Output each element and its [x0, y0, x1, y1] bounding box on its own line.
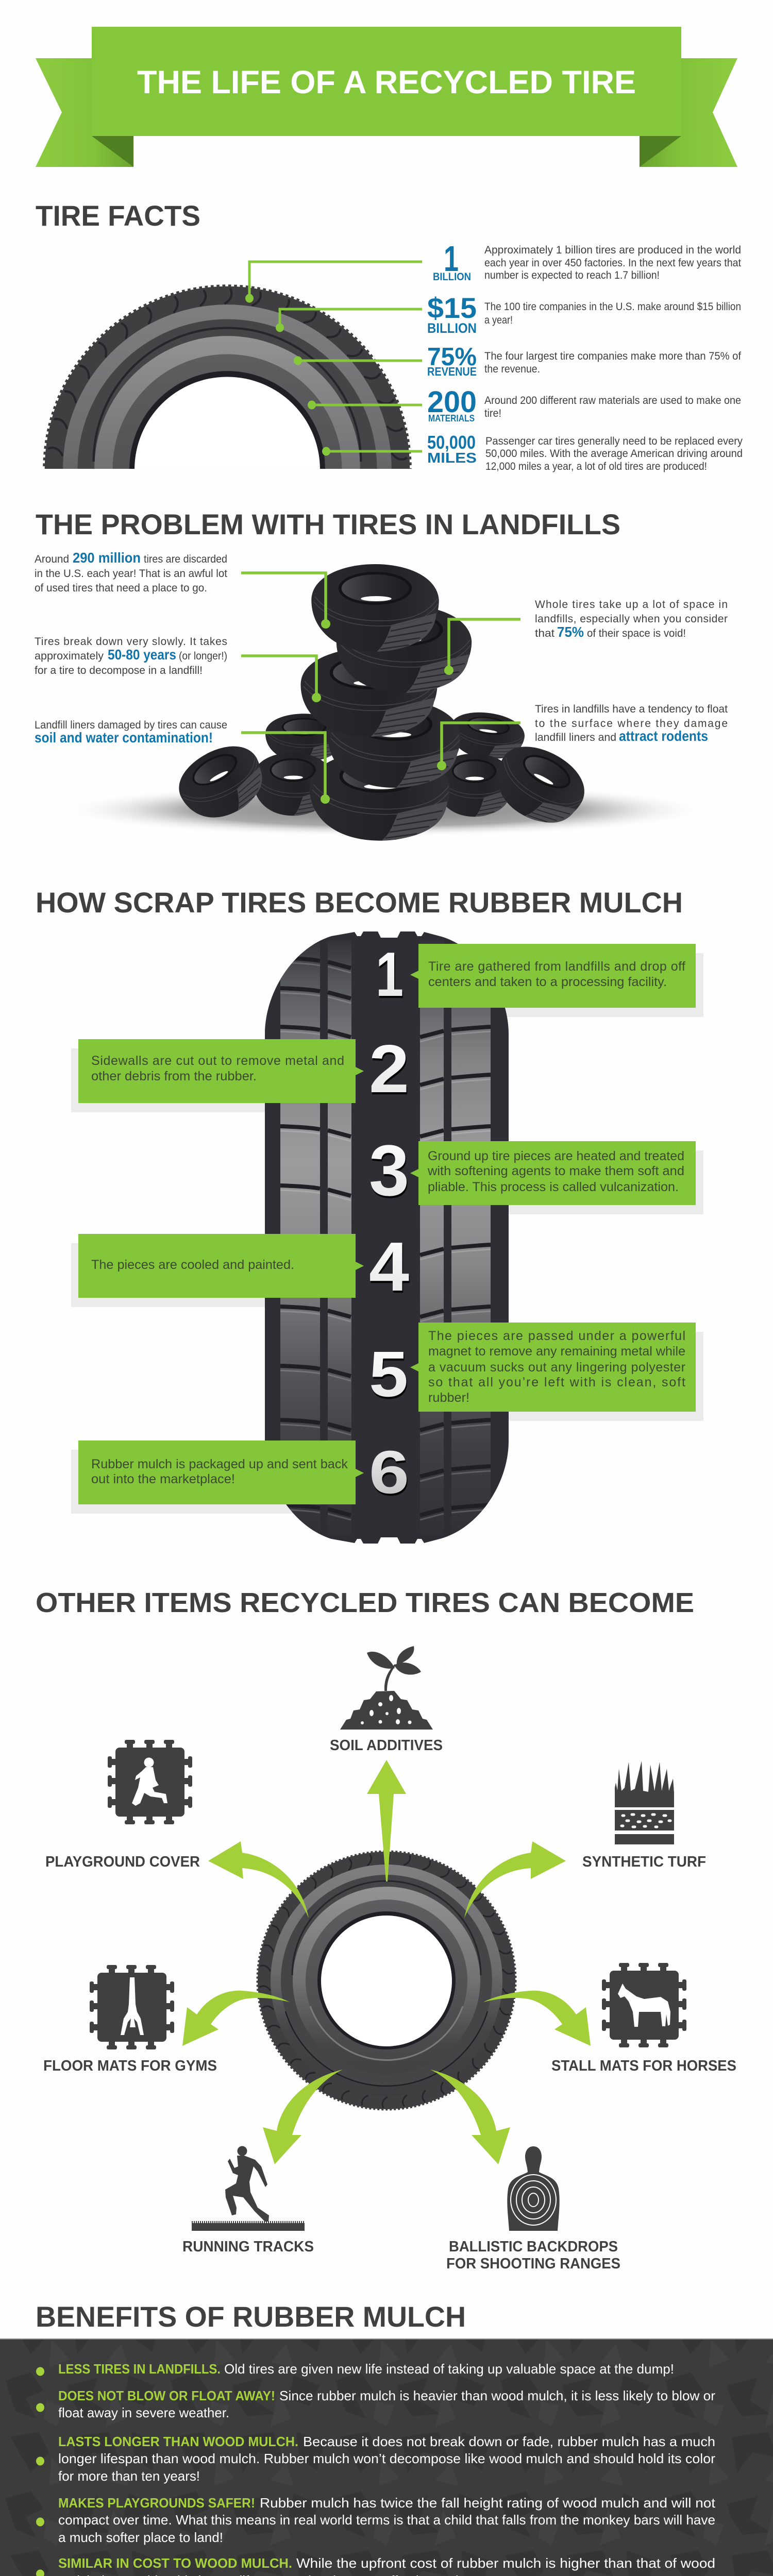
benefit 3 — [36, 2434, 715, 2484]
fact: 1 billion: Approximately 1 billion tires are produced in the world — [484, 244, 741, 256]
text: attract rodents: landfill liners and — [535, 732, 616, 743]
benefit 1: Old tires are given new life instead of taking up valuable space at the dump! — [224, 2361, 674, 2377]
benefit 5 — [36, 2555, 715, 2576]
step 5: The pieces are passed under a powerful — [428, 1329, 685, 1343]
fact: 200 materials: 200 — [427, 385, 477, 419]
benefit 2: float away in severe weather. — [58, 2405, 229, 2420]
fact: 75% revenue: The four largest tire companies make more than 75% of — [484, 350, 741, 362]
fact: $15 billion: The 100 tire companies in the U.S. make around $15 billion — [484, 301, 741, 313]
text: 50-80 years: for a tire to decompose in a landfill! — [35, 665, 203, 676]
step 6: Rubber mulch is packaged up and sent back — [91, 1457, 348, 1471]
heading: the problem with tires in landfills: THE PROBLEM WITH TIRES IN LANDFILLS — [36, 508, 620, 540]
step 1: centers and taken to a processing facility. — [428, 975, 667, 989]
step 4: 4 — [369, 1228, 409, 1306]
step 2 — [78, 1031, 409, 1107]
text: 50-80 years: (or longer!) — [179, 650, 227, 662]
item: synthetic turf — [582, 1761, 706, 1870]
step 3 — [369, 1130, 696, 1211]
text: 50-80 years: Tires break down very slowly. It takes — [35, 636, 227, 648]
benefit 2: DOES NOT BLOW OR FLOAT AWAY! — [58, 2388, 275, 2403]
fact: 75% revenue: REVENUE — [427, 365, 477, 378]
item: ballistic backdrops: BALLISTIC BACKDROPS — [449, 2239, 618, 2255]
item: running tracks — [182, 2146, 314, 2255]
step box shadows — [71, 953, 703, 1514]
benefit 4 — [36, 2495, 716, 2545]
step 6: out into the marketplace! — [91, 1472, 235, 1486]
arrows from hub tire — [182, 1760, 591, 2164]
step 5: 5 — [369, 1338, 408, 1410]
heading: how scrap tires become rubber mulch: HOW SCRAP TIRES BECOME RUBBER MULCH — [36, 886, 683, 919]
item: soil additives: SOIL ADDITIVES — [330, 1737, 443, 1754]
text: 290 million tires: tires are discarded — [144, 553, 227, 565]
step 4: The pieces are cooled and painted. — [91, 1258, 294, 1272]
fact: $15 billion: BILLION — [427, 320, 477, 336]
fact: 1 billion: each year in over 450 factories. In the next few years that — [484, 257, 741, 269]
step 2: 2 — [369, 1031, 409, 1107]
benefit 2: Since rubber mulch is heavier than wood mulch, it is less likely to blow or — [279, 2388, 715, 2403]
fact: $15 billion — [427, 292, 741, 336]
item: stall mats for horses — [551, 1963, 736, 2074]
text: 75% of space is void: landfills, especially when you consider — [535, 613, 728, 625]
text: 75% of space is void — [535, 599, 728, 640]
benefit 1: LESS TIRES IN LANDFILLS. — [58, 2361, 221, 2377]
step 1 — [376, 939, 696, 1009]
text: 75% of space is void: of their space is void! — [587, 628, 686, 639]
heading: benefits of rubber mulch: BENEFITS OF RUBBER MULCH — [36, 2300, 466, 2333]
step 1: Tire are gathered from landfills and drop off — [428, 959, 685, 974]
text: 290 million tires — [35, 550, 227, 594]
item: ballistic backdrops: FOR SHOOTING RANGES — [446, 2256, 620, 2272]
fact: 50,000 miles — [427, 432, 743, 472]
text: 290 million tires: 290 million — [73, 550, 141, 566]
text: 75% of space is void: 75% — [557, 624, 584, 640]
tire tread illustration — [265, 931, 509, 1544]
benefit 3: LASTS LONGER THAN WOOD MULCH. — [58, 2434, 298, 2449]
text: 75% of space is void: Whole tires take up a lot of space in — [535, 599, 728, 611]
fact: 1 billion: 1 — [444, 239, 459, 279]
benefit 4: MAKES PLAYGROUNDS SAFER! — [58, 2495, 255, 2511]
panel: benefits — [0, 2338, 773, 2576]
heading: tire facts: TIRE FACTS — [36, 199, 200, 232]
fact: 75% revenue — [427, 343, 741, 378]
hub tire — [257, 1851, 516, 2110]
tire pile illustration — [60, 564, 709, 841]
item: playground cover — [45, 1740, 200, 1870]
step 2: other debris from the rubber. — [91, 1069, 257, 1083]
fact: 50,000 miles: Passenger car tires generally need to be replaced every — [485, 435, 743, 447]
step 6 — [78, 1438, 409, 1506]
fact: 50,000 miles: 50,000 — [427, 432, 476, 453]
text: 75% of space is void: that — [535, 628, 554, 639]
text: attract rodents: to the surface where they damage — [535, 718, 728, 730]
step 3: 3 — [369, 1130, 409, 1211]
benefit 4: compact over time. What this means in real world terms is that a child that falls from the monkey bars will have — [58, 2512, 715, 2528]
callout lines on tire pile — [241, 573, 520, 804]
text: attract rodents: Tires in landfills have a tendency to float — [535, 703, 728, 715]
title banner: THE LIFE OF A RECYCLED TIRE — [137, 64, 636, 100]
item: running tracks: RUNNING TRACKS — [182, 2239, 314, 2255]
text: 50-80 years: 50-80 years — [108, 647, 176, 663]
text: soil and water contamination — [35, 719, 227, 745]
step 1: 1 — [376, 939, 404, 1009]
item: ballistic backdrops — [446, 2146, 620, 2272]
fact: 200 materials: MATERIALS — [428, 413, 475, 423]
step 3: Ground up tire pieces are heated and treated — [428, 1149, 684, 1163]
heading: other items recycled tires can become: OTHER ITEMS RECYCLED TIRES CAN BECOME — [36, 1587, 694, 1618]
step 5: magnet to remove any remaining metal while — [428, 1344, 685, 1359]
benefit 4: a much softer place to land! — [58, 2530, 223, 2545]
step 4 — [78, 1228, 409, 1306]
text: 50-80 years: approximately — [35, 650, 104, 662]
fact: 200 materials — [427, 385, 741, 423]
item: playground cover: PLAYGROUND COVER — [45, 1854, 200, 1870]
step 2: Sidewalls are cut out to remove metal and — [91, 1054, 344, 1068]
fact: 1 billion — [433, 239, 741, 283]
fact: 50,000 miles: 12,000 miles a year, a lot of old tires are produced! — [485, 461, 707, 472]
item: synthetic turf: SYNTHETIC TURF — [582, 1854, 706, 1870]
step 3: pliable. This process is called vulcanization. — [428, 1180, 679, 1194]
text: soil and water contamination: soil and water contamination! — [35, 730, 213, 745]
fact: 75% revenue: 75% — [427, 343, 477, 371]
benefit 5: SIMILAR IN COST TO WOOD MULCH. — [58, 2555, 292, 2571]
fact: 50,000 miles: MILES — [427, 450, 477, 466]
item: floor mats for gyms — [43, 1965, 217, 2074]
item: soil additives — [330, 1646, 443, 1754]
benefit 4: Rubber mulch has twice the fall height rating of wood mulch and will not — [260, 2495, 716, 2511]
text: soil and water contamination: Landfill liners damaged by tires can cause — [35, 719, 227, 731]
benefit 3: for more than ten years! — [58, 2468, 200, 2484]
text: 290 million tires: in the U.S. each year! That is an awful lot — [35, 568, 227, 580]
fact: 75% revenue: the revenue. — [484, 363, 540, 375]
step 5: so that all you’re left with is clean, soft — [428, 1375, 685, 1389]
step 6: 6 — [369, 1438, 409, 1506]
text: attract rodents: attract rodents — [619, 728, 708, 744]
fact: $15 billion: $15 — [427, 292, 477, 324]
text: 290 million tires: of used tires that need a place to go. — [35, 582, 207, 594]
fact: 200 materials: tire! — [484, 408, 501, 419]
fact: 200 materials: Around 200 different raw materials are used to make one — [484, 395, 741, 406]
fact: $15 billion: a year! — [484, 314, 513, 326]
benefit 5: While the upfront cost of rubber mulch is higher than that of wood — [296, 2555, 715, 2571]
benefit 2 — [36, 2388, 715, 2420]
callout lines on half tire — [245, 262, 422, 455]
tire illustration: half tire — [43, 284, 412, 469]
fact: 1 billion: BILLION — [433, 271, 471, 283]
step 5 — [369, 1323, 696, 1412]
benefit 3: longer lifespan than wood mulch. Rubber mulch won’t decompose like wood mulch and should hold its color — [58, 2451, 715, 2466]
benefit 3: Because it does not break down or fade, rubber mulch has a much — [303, 2434, 715, 2449]
item: floor mats for gyms: FLOOR MATS FOR GYMS — [43, 2058, 217, 2074]
step 5: rubber! — [428, 1391, 469, 1405]
text: attract rodents — [535, 703, 728, 744]
text: 290 million tires: Around — [35, 553, 69, 565]
fact: 50,000 miles: 50,000 miles. With the average American driving around — [485, 448, 743, 460]
step 5: a vacuum sucks out any lingering polyester — [428, 1360, 685, 1375]
fact: 1 billion: number is expected to reach 1.7 billion! — [484, 269, 660, 281]
text: 50-80 years — [35, 636, 227, 676]
step 3: with softening agents to make them soft and — [427, 1164, 684, 1178]
title banner — [36, 27, 737, 167]
item: stall mats for horses: STALL MATS FOR HORSES — [551, 2058, 736, 2074]
